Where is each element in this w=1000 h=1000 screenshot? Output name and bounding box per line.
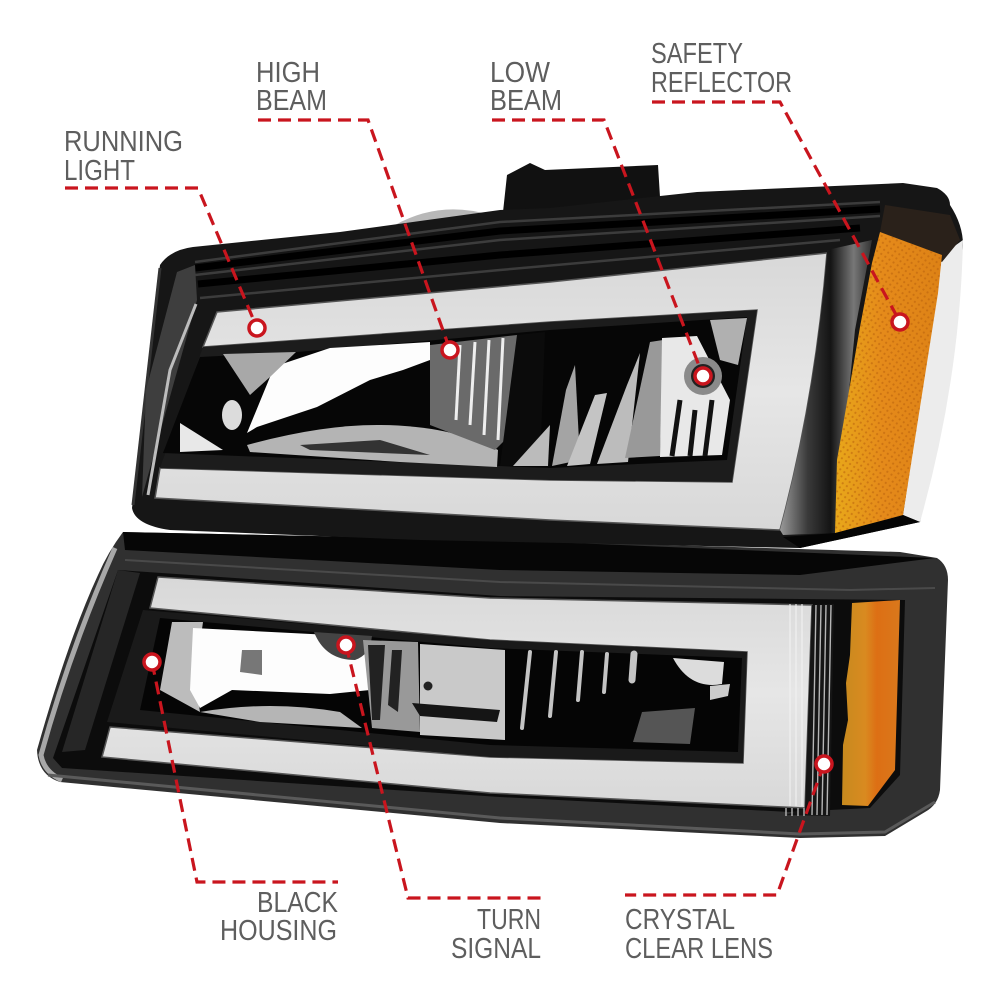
left rim band (142, 265, 197, 497)
label: low beam (490, 57, 562, 117)
low beam white reflector (660, 336, 730, 457)
signal outer housing (37, 532, 948, 838)
inner black frame (53, 570, 905, 812)
running light bar (102, 577, 812, 808)
label: high beam (256, 57, 327, 117)
dome behind housing (395, 209, 490, 225)
label: low beam: LOW (490, 57, 551, 89)
label: high beam: HIGH (256, 57, 320, 89)
label: running light: LIGHT (64, 155, 135, 187)
marker: safety reflector (892, 314, 908, 330)
low beam blades (513, 425, 550, 466)
marker: running light (249, 320, 265, 336)
label: high beam: BEAM (256, 85, 327, 117)
low beam bulb socket (684, 357, 722, 395)
running light bar (155, 253, 827, 530)
label: black housing: HOUSING (220, 915, 337, 947)
label: safety reflector (651, 38, 792, 99)
lower amber marker (842, 600, 900, 806)
lens chamber (160, 310, 757, 482)
label: running light (64, 126, 183, 187)
label: crystal clear lens: CRYSTAL (625, 904, 735, 936)
upper headlight assembly (132, 163, 963, 548)
label: turn signal (451, 904, 541, 965)
fan streaks (223, 352, 296, 395)
upper black band (123, 532, 935, 575)
label: safety reflector: SAFETY (651, 38, 743, 70)
high beam white reflector (247, 342, 430, 433)
right bulb chamber details (522, 652, 634, 728)
lower dish (247, 425, 498, 467)
mounting bracket (503, 163, 660, 212)
label: black housing: BLACK (257, 887, 339, 919)
marker: black housing (144, 654, 160, 670)
marker: high beam (442, 342, 458, 358)
marker: low beam (695, 368, 711, 384)
left reflector streaks (160, 622, 203, 712)
bulb reflection (222, 400, 242, 430)
high beam vertical streaks (430, 335, 517, 450)
bottom dish (200, 706, 362, 728)
marker: crystal clear lens (816, 756, 832, 772)
lens chamber (107, 610, 747, 763)
marker: turn signal (338, 637, 354, 653)
label: crystal clear lens (625, 904, 773, 965)
lower bumper signal assembly (37, 532, 948, 838)
top ribs (195, 202, 880, 298)
label: safety reflector: REFLECTOR (651, 67, 792, 99)
clear corner lens (903, 240, 963, 522)
label: low beam: BEAM (490, 85, 562, 117)
headlight housing (132, 183, 963, 548)
tiled reflector (420, 644, 505, 740)
label: black housing (220, 887, 339, 947)
dashed leader lines (65, 102, 900, 898)
stepped reflector (363, 640, 420, 732)
bar ribbing (790, 604, 802, 806)
safety reflector amber (835, 232, 942, 533)
label: turn signal: TURN (477, 904, 541, 936)
band ribbing (125, 560, 935, 590)
vertical rib strip (786, 604, 834, 816)
label: running light: RUNNING (64, 126, 183, 158)
label: turn signal: SIGNAL (451, 933, 541, 965)
bottom black lip (783, 515, 920, 548)
socket ring (314, 632, 372, 660)
turn signal white reflector (190, 628, 370, 708)
side ribbed strip (780, 240, 872, 535)
label: crystal clear lens: CLEAR LENS (625, 933, 773, 965)
